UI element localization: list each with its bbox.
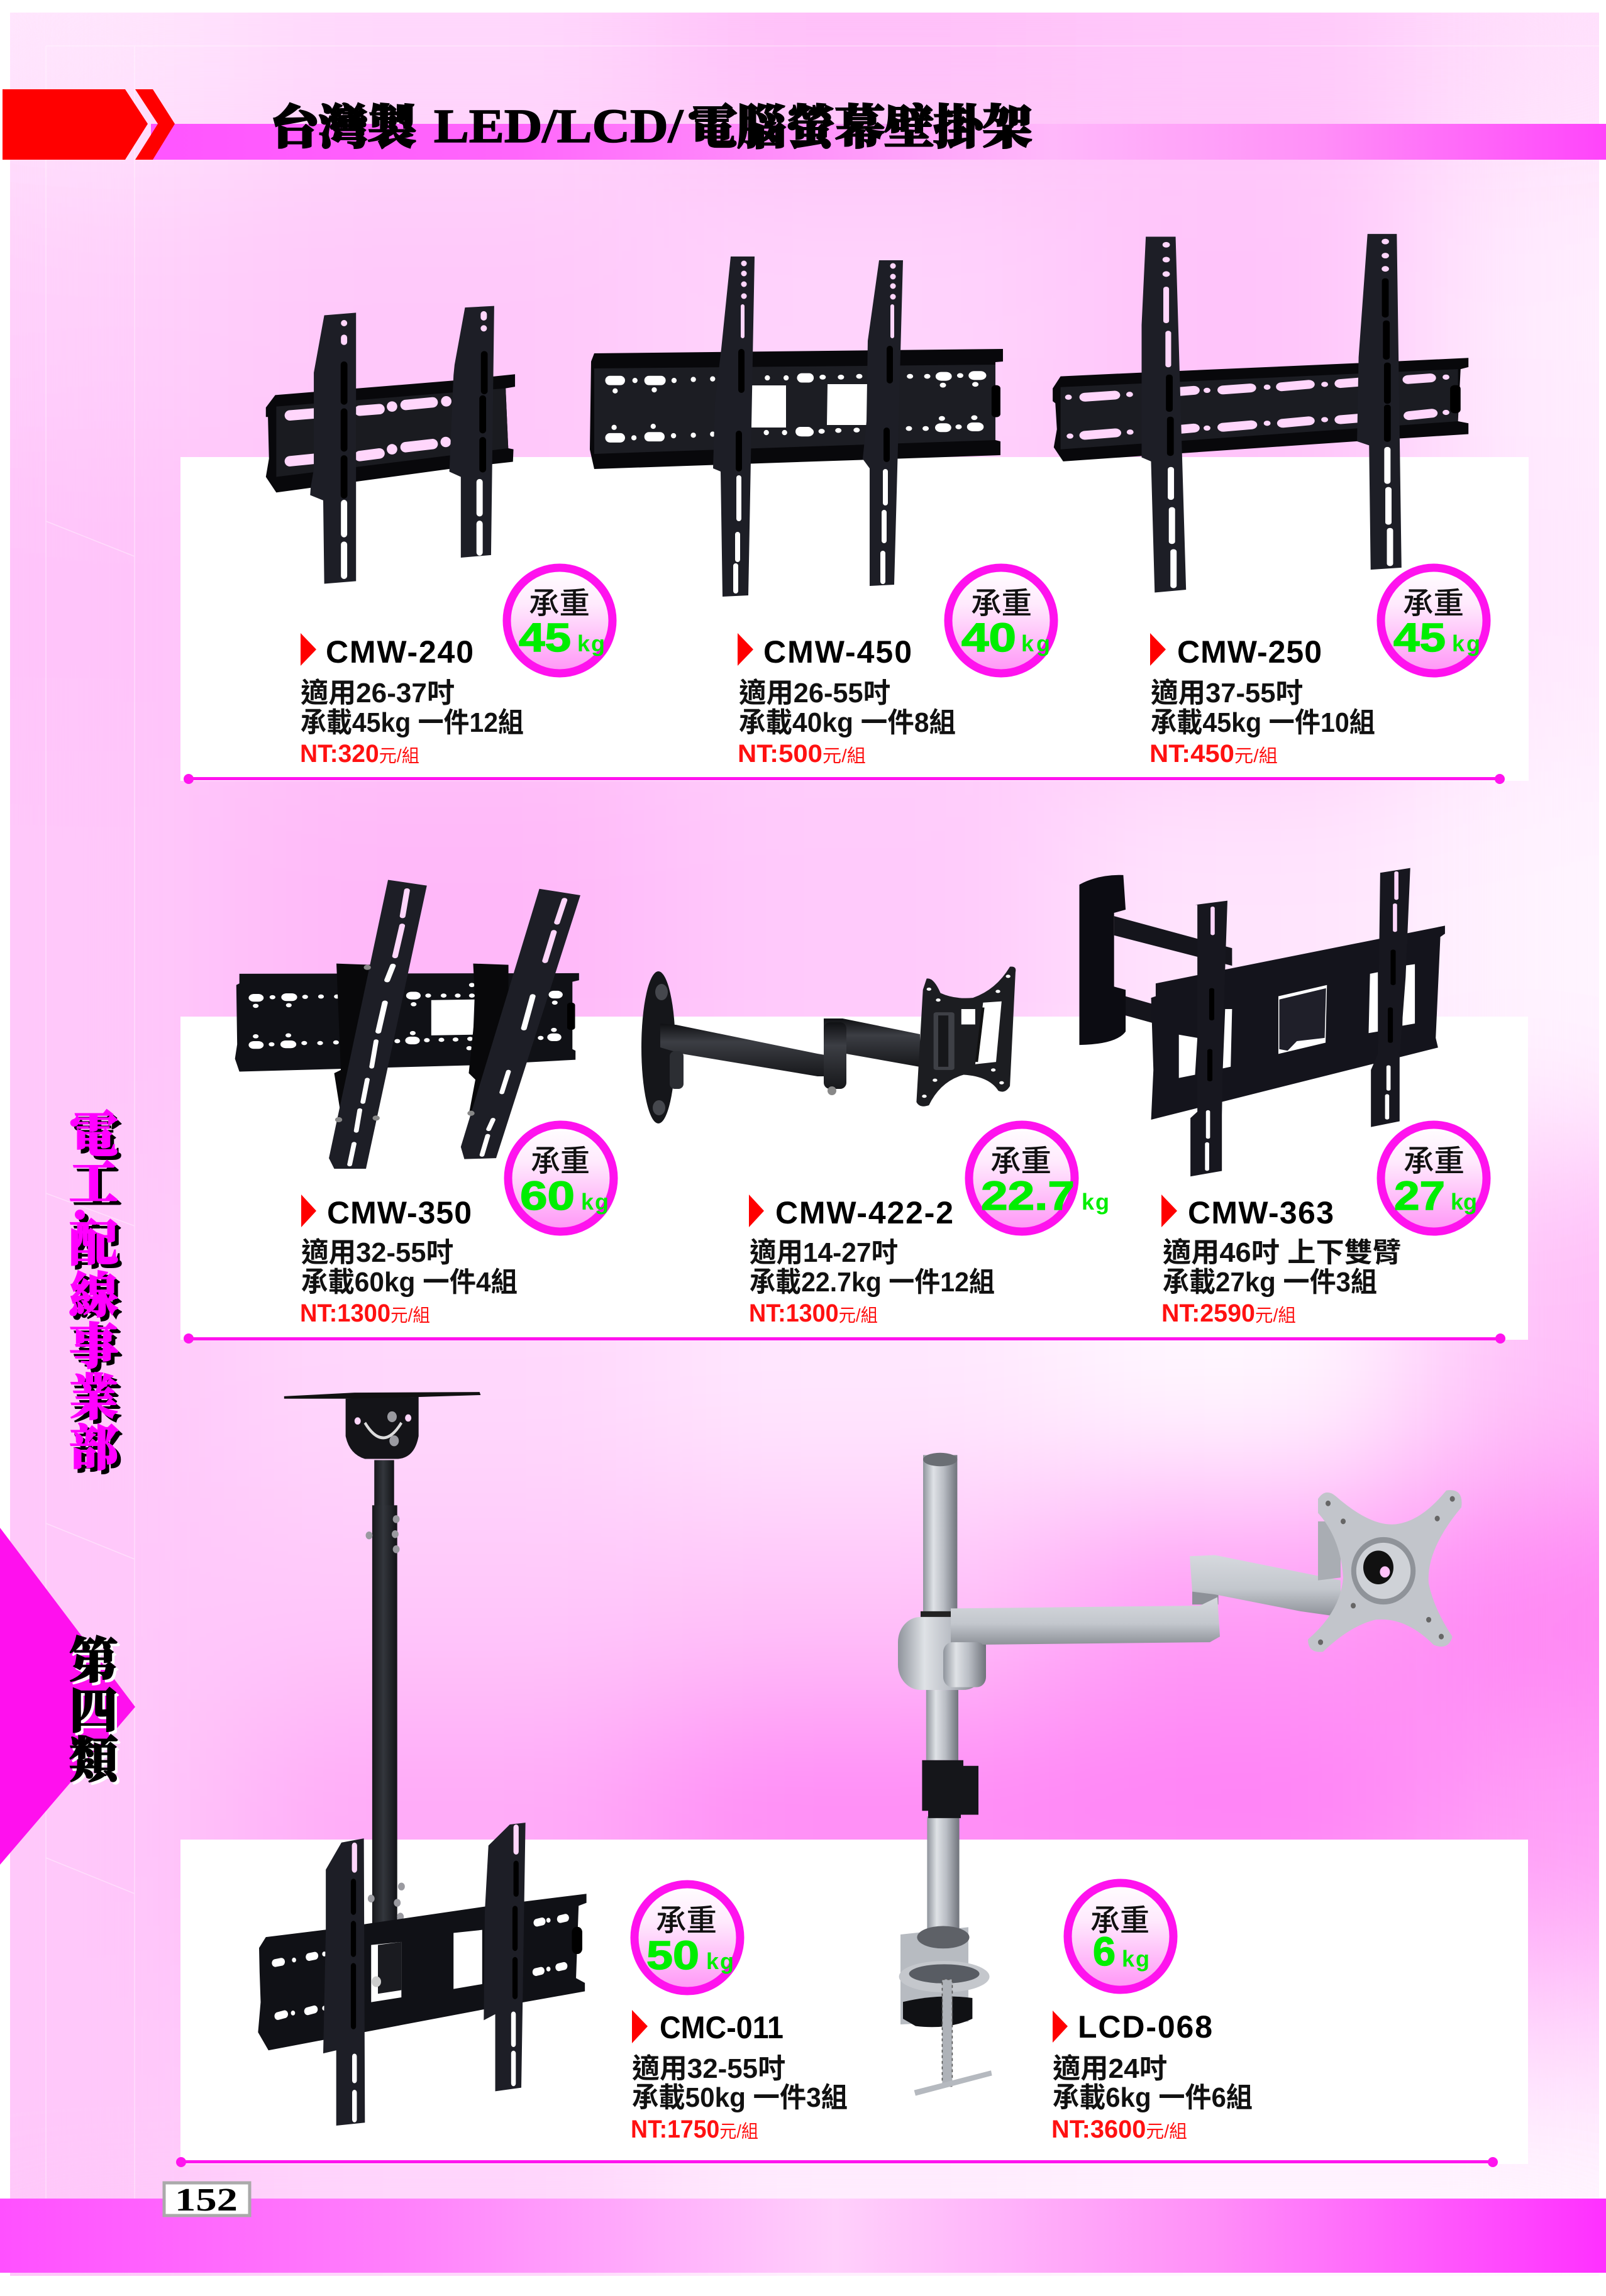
magenta category triangle	[0, 1528, 135, 1865]
product info: LCD-068	[1051, 2009, 1253, 2143]
product info: CMW-363: 適用46吋 上下雙臂	[1163, 1237, 1401, 1268]
product info: CMW-422-2: CMW-422-2	[775, 1195, 953, 1230]
panel: row 3 white card	[180, 1840, 1528, 2164]
weight badge: 27kg CMW-363	[1381, 1125, 1487, 1232]
weight badge: 27kg CMW-363: 承重	[1404, 1136, 1465, 1180]
side label: department: 配	[69, 1205, 118, 1275]
side label: department: 工	[69, 1144, 118, 1214]
product info: CMW-350: CMW-350	[327, 1195, 472, 1230]
product info: CMW-422-2: NT:1300元/組	[749, 1300, 878, 1327]
product info: CMW-450: 承載40kg 一件8組	[739, 707, 956, 738]
product info: CMW-250: 承載45kg 一件10組	[1151, 707, 1375, 738]
page number: 152	[175, 2182, 238, 2218]
side label: department: 部	[69, 1409, 118, 1479]
weight badge: 45kg CMW-250: kg	[1452, 631, 1480, 656]
product info: CMW-240	[300, 633, 524, 768]
title: 電腦螢幕壁掛架	[688, 91, 1032, 157]
side label: department: 配	[73, 1208, 122, 1279]
product image: CMW-450 bracket	[590, 257, 1003, 597]
row 3 divider line	[176, 2157, 1498, 2167]
product info: CMW-363: NT:2590元/組	[1161, 1300, 1296, 1327]
product info: CMW-363	[1161, 1195, 1401, 1327]
side label: category four: 四	[72, 1674, 121, 1745]
weight badge: 40kg CMW-450	[948, 568, 1054, 673]
product info: CMW-363: CMW-363	[1188, 1195, 1334, 1230]
weight badge: 45kg CMW-240: kg	[577, 631, 605, 656]
product info: CMW-240: 承載45kg 一件12組	[301, 707, 524, 738]
weight badge: 60kg CMW-350	[508, 1125, 614, 1232]
side label: category four: 四	[69, 1672, 118, 1742]
side label: department: 工	[73, 1147, 122, 1218]
product info: CMC-011: CMC-011	[660, 2010, 784, 2045]
row 2 divider line	[184, 1333, 1505, 1344]
weight badge: 22.7kg CMW-422-2: 承重	[990, 1136, 1051, 1180]
weight badge: 60kg CMW-350: 60	[520, 1173, 575, 1218]
side label: category four	[69, 1621, 124, 1794]
product info: CMW-350: NT:1300元/組	[300, 1300, 430, 1327]
weight badge: 27kg CMW-363: 27	[1394, 1173, 1445, 1218]
product info: CMW-240: CMW-240	[326, 634, 473, 670]
product info: CMW-240: NT:320元/組	[300, 740, 419, 768]
weight badge: 22.7kg CMW-422-2: 22.7	[981, 1173, 1075, 1218]
product info: CMW-422-2: 承載22.7kg 一件12組	[750, 1267, 995, 1298]
weight badge: 50kg CMC-011	[634, 1884, 740, 1991]
weight badge: 22.7kg CMW-422-2: kg	[1082, 1189, 1109, 1215]
product info: CMC-011: 承載50kg 一件3組	[632, 2082, 848, 2113]
weight badge: 45kg CMW-240: 承重	[529, 578, 590, 622]
weight badge: 6kg LCD-068: kg	[1122, 1946, 1149, 1972]
side label: category four: 類	[72, 1723, 124, 1794]
weight badge: 45kg CMW-250: 45	[1393, 615, 1446, 660]
weight badge: 27kg CMW-363: kg	[1451, 1189, 1477, 1215]
product image: LCD-068 desk arm	[898, 1453, 1461, 2096]
product info: CMW-450: CMW-450	[763, 634, 912, 670]
side label: department: 部	[73, 1413, 122, 1483]
product info: CMW-422-2	[749, 1195, 995, 1327]
weight badge: 6kg LCD-068	[1068, 1883, 1173, 1990]
side label: department: 業	[69, 1359, 118, 1429]
side label: department: 事	[73, 1311, 122, 1382]
product info: LCD-068: NT:3600元/組	[1051, 2116, 1187, 2143]
page number	[164, 2182, 250, 2218]
product info: LCD-068: 承載6kg 一件6組	[1053, 2082, 1253, 2113]
side label: department: 電	[69, 1096, 118, 1166]
title	[270, 91, 1032, 157]
product info: CMW-450: NT:500元/組	[738, 740, 866, 768]
product info: CMC-011: NT:1750元/組	[631, 2116, 758, 2143]
product info: CMW-350: 承載60kg 一件4組	[301, 1267, 518, 1298]
side label: department	[69, 1096, 122, 1483]
product image: CMW-250 bracket	[1053, 234, 1468, 592]
title: LED/LCD/	[434, 100, 684, 153]
product info: CMW-450	[738, 633, 956, 768]
product info: LCD-068: 適用24吋	[1053, 2053, 1167, 2084]
weight badge: 6kg LCD-068: 承重	[1090, 1896, 1149, 1940]
product image: CMW-350 tilt bracket	[235, 880, 580, 1169]
product info: CMW-250: 適用37-55吋	[1151, 678, 1303, 709]
side label: department: 電	[73, 1100, 122, 1170]
weight badge: 40kg CMW-450: 承重	[971, 578, 1032, 622]
weight badge: 60kg CMW-350: 承重	[531, 1136, 590, 1180]
product info: CMW-250: CMW-250	[1177, 634, 1322, 670]
side label: category four: 第	[69, 1621, 118, 1692]
product info: CMW-250: NT:450元/組	[1149, 740, 1278, 768]
side label: department: 線	[73, 1261, 122, 1331]
top header band	[151, 124, 1606, 160]
bottom band	[0, 2199, 1606, 2273]
weight badge: 50kg CMC-011: kg	[706, 1948, 734, 1974]
product info: CMW-350: 適用32-55吋	[301, 1237, 453, 1268]
panel: row 2 white card	[180, 1017, 1528, 1340]
product info: CMW-363: 承載27kg 一件3組	[1163, 1267, 1377, 1298]
weight badge: 45kg CMW-250: 承重	[1403, 578, 1464, 622]
weight badge: 40kg CMW-450: 40	[961, 615, 1016, 660]
row 1 divider line	[184, 774, 1505, 784]
side label: department: 線	[69, 1257, 118, 1327]
product info: CMW-350	[300, 1195, 518, 1327]
product info: CMW-240: 適用26-37吋	[301, 678, 455, 709]
weight badge: 22.7kg CMW-422-2	[969, 1125, 1109, 1232]
side label: category four: 類	[69, 1721, 121, 1791]
weight badge: 40kg CMW-450: kg	[1021, 631, 1050, 656]
title: 台灣製	[270, 91, 416, 157]
product image: CMW-363 dual arm	[1079, 868, 1445, 1176]
product info: CMW-450: 適用26-55吋	[739, 678, 890, 709]
weight badge: 45kg CMW-250	[1381, 568, 1487, 673]
weight badge: 6kg LCD-068: 6	[1093, 1929, 1116, 1974]
product image: CMW-240 bracket	[266, 306, 515, 583]
product info: CMC-011: 適用32-55吋	[632, 2053, 785, 2084]
panel: row 1 white card	[180, 457, 1529, 781]
header red chevron	[3, 89, 175, 160]
product info: LCD-068: LCD-068	[1078, 2009, 1212, 2045]
product info: CMC-011	[631, 2010, 848, 2143]
product info: CMW-250	[1149, 633, 1375, 768]
side label: department: 業	[73, 1362, 122, 1433]
side label: department: 事	[69, 1308, 118, 1378]
weight badge: 50kg CMC-011: 50	[646, 1933, 699, 1978]
weight badge: 60kg CMW-350: kg	[581, 1189, 609, 1215]
weight badge: 45kg CMW-240: 45	[519, 615, 571, 660]
side label: category four: 第	[72, 1624, 121, 1694]
product image: CMW-422-2 swing arm	[641, 966, 1016, 1123]
weight badge: 50kg CMC-011: 承重	[656, 1896, 717, 1940]
product info: CMW-422-2: 適用14-27吋	[750, 1237, 898, 1268]
product image: CMC-011 ceiling mount	[258, 1392, 587, 2126]
weight badge: 45kg CMW-240	[507, 568, 612, 673]
